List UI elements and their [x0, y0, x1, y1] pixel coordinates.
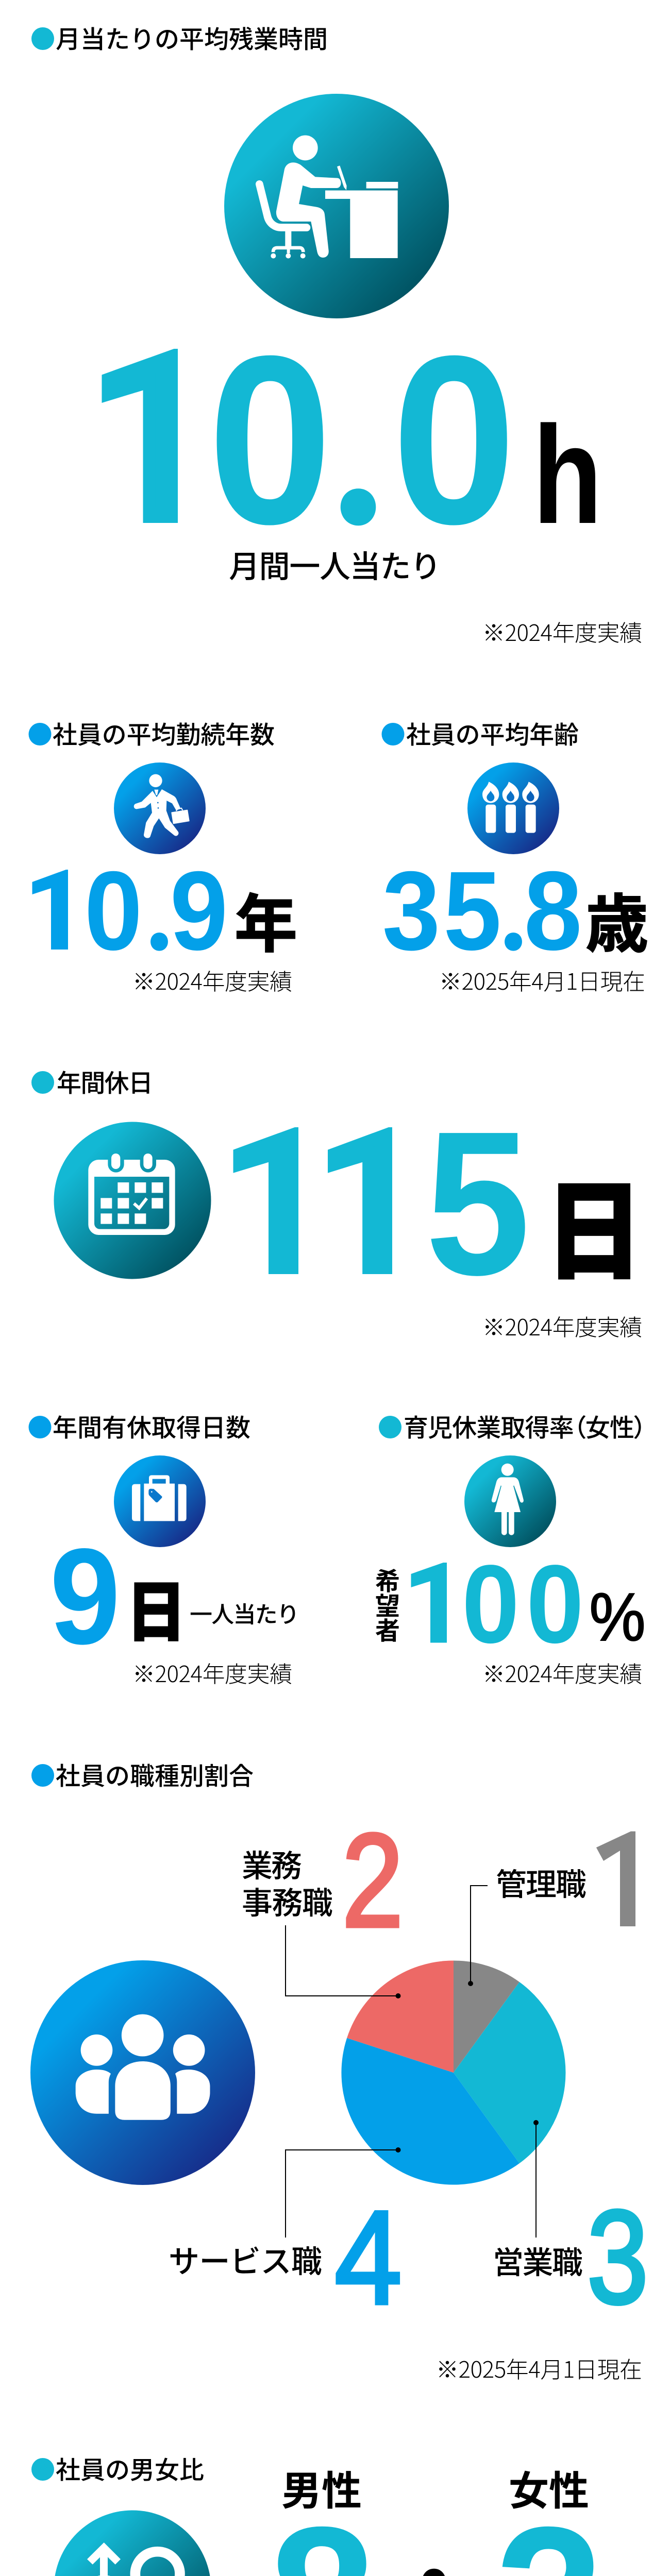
note: 2024年度実績: ※2024年度実績 [482, 1309, 642, 1342]
stat: 希望者 100% [375, 1563, 644, 1643]
stat: 115日: 1 [203, 1089, 345, 1318]
icon: person working at desk [224, 94, 449, 318]
stat: 10.9年: 年 [234, 874, 297, 965]
stat: 10.0 h: h [532, 397, 602, 553]
heading: 社員の平均年齢: 社員の平均年齢 [406, 715, 579, 751]
label: 業務事務職 2: 業務 [242, 1841, 302, 1886]
stat: 10.0 h: 1 [66, 306, 233, 574]
stat: 希望者 100%: % [589, 1580, 646, 1655]
icon: suitcase [114, 1455, 206, 1547]
stat: 10.0 h: . [327, 299, 390, 579]
icon: calendar [54, 1122, 211, 1279]
leader line: 管理職 [468, 1886, 488, 1986]
stat: 10.9年: 9 [170, 848, 228, 974]
stat: 115日: 日 [545, 1147, 643, 1299]
stat: 10.9年: 0 [85, 848, 142, 974]
leader line: サービス職 [286, 2147, 401, 2238]
label: 業務事務職 2: 2 [342, 1806, 404, 1955]
label: 管理職 1: 管理職 [496, 1860, 587, 1905]
label: 業務事務職 2 [242, 1806, 404, 1955]
note: 2024年度実績: ※2024年度実績 [132, 1656, 292, 1689]
stat: 9日 一人当たり [49, 1520, 299, 1673]
note: 2024年度実績: ※2024年度実績 [482, 1656, 642, 1689]
label: 営業職 3 [493, 2183, 648, 2331]
heading: 社員の職種別割合: 社員の職種別割合 [56, 1756, 254, 1792]
heading: 年間有休取得日数: 年間有休取得日数 [53, 1408, 250, 1444]
stat: 10.9年: . [144, 839, 175, 977]
stat: 希望者 100%: 希 [375, 1561, 400, 1597]
stat: 希望者 100%: 0 [526, 1542, 584, 1667]
caption: 月間一人当たり: 月間一人当たり [229, 542, 441, 587]
label: 男性: 男性 [281, 2459, 362, 2517]
leader line: 営業職 [533, 2120, 539, 2238]
stat: 10.9年 [32, 870, 296, 953]
stat: 35.8歳 [382, 839, 648, 977]
stat: 10.0 h: 0 [392, 307, 516, 574]
stat: 9日 一人当たり: 9 [49, 1520, 121, 1673]
stat: 115日 [203, 1089, 643, 1318]
stat: 希望者 100%: 1 [395, 1542, 472, 1666]
stat: 希望者 100%: 0 [462, 1542, 520, 1667]
note: 2024年度実績: ※2024年度実績 [132, 963, 292, 996]
heading: 月当たりの平均残業時間: 月当たりの平均残業時間 [56, 19, 328, 55]
label: 営業職 3: 3 [587, 2183, 648, 2331]
stat: 9日 一人当たり: 日 [126, 1560, 186, 1653]
note: 2025年4月1日現在: ※2025年4月1日現在 [436, 2351, 642, 2384]
stat: 希望者 100%: 望 [375, 1586, 400, 1622]
stat: 10.9年: 1 [15, 849, 94, 974]
stat: 35.8歳: . [498, 839, 529, 977]
heading: 育児休業取得率（女性）: 育児休業取得率（女性） [404, 1408, 646, 1444]
stat: 8 : 2 [269, 2484, 604, 2576]
label: 管理職 1: 1 [575, 1806, 667, 1955]
note: 2024年度実績: ※2024年度実績 [482, 615, 642, 648]
stat: 35.8歳: 5 [443, 848, 501, 974]
label: 業務事務職 2: 事務職 [242, 1878, 333, 1923]
icon: woman [464, 1455, 556, 1547]
label: サービス職 4: 4 [334, 2184, 402, 2332]
label: 営業職 3: 営業職 [493, 2238, 583, 2283]
icon: group of people [30, 1960, 255, 2185]
label: サービス職 4: サービス職 [169, 2237, 322, 2282]
leader line: 業務事務職 [286, 1925, 401, 1998]
stat: 115日: 5 [425, 1089, 530, 1318]
stat: 35.8歳: 歳 [585, 874, 648, 965]
stat: 10.0 h [66, 299, 602, 579]
label: 女性: 女性 [509, 2459, 589, 2517]
stat: 35.8歳: 3 [382, 848, 440, 974]
stat: 10.0 h: 0 [208, 307, 332, 574]
label: サービス職 4 [169, 2184, 402, 2332]
note: 2025年4月1日現在: ※2025年4月1日現在 [439, 963, 645, 996]
heading: 社員の平均勤続年数: 社員の平均勤続年数 [53, 715, 275, 751]
icon: walking businessperson [114, 762, 206, 854]
icon: gender symbols [54, 2510, 211, 2576]
heading: 社員の男女比: 社員の男女比 [56, 2450, 204, 2486]
stat: 115日: 1 [296, 1089, 439, 1318]
icon: three candles [467, 762, 559, 854]
stat: 9日 一人当たり: 一人当たり [190, 1596, 299, 1629]
heading: 年間休日: 年間休日 [57, 1063, 153, 1099]
stat: 希望者 100%: 者 [375, 1611, 400, 1647]
stat: 35.8歳: 8 [524, 848, 582, 974]
label: 管理職 1 [497, 1831, 635, 1926]
pie chart: job type ratio 1:3:4:2 [341, 1961, 566, 2185]
